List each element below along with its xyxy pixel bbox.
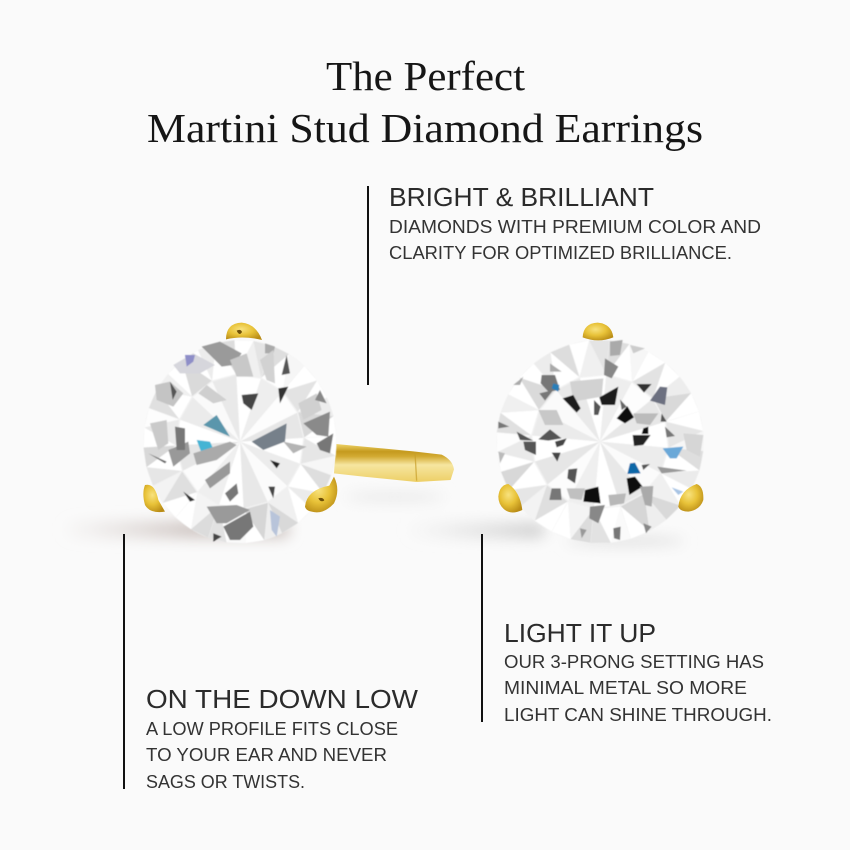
callout: bright and brilliant: DIAMONDS WITH PREMIUM COLOR AND xyxy=(389,216,761,237)
callout: on the down low: SAGS OR TWISTS. xyxy=(146,771,305,792)
title xyxy=(147,53,703,151)
prong: top xyxy=(226,323,262,340)
callout: light it up: OUR 3-PRONG SETTING HAS xyxy=(504,651,764,672)
prong: lower right xyxy=(678,484,703,512)
callout: bright and brilliant: CLARITY FOR OPTIMIZED BRILLIANCE. xyxy=(389,242,732,263)
callout: on the down low: A LOW PROFILE FITS CLOSE xyxy=(146,718,398,739)
callout: bright and brilliant xyxy=(367,182,761,385)
earring post xyxy=(334,444,454,482)
callout: light it up: LIGHT CAN SHINE THROUGH. xyxy=(504,704,772,725)
prong: lower left xyxy=(498,484,522,512)
callout: on the down low xyxy=(123,534,418,792)
shadows under earrings xyxy=(60,493,685,545)
prong: lower left xyxy=(143,485,165,512)
callout: bright and brilliant: BRIGHT & BRILLIANT xyxy=(389,182,654,212)
left diamond xyxy=(131,327,349,556)
callout: light it up: LIGHT IT UP xyxy=(504,618,656,648)
prong highlights xyxy=(237,330,324,501)
callout: on the down low: ON THE DOWN LOW xyxy=(146,684,418,714)
right diamond xyxy=(486,330,714,553)
title: The Perfect xyxy=(326,53,526,99)
callout: light it up: MINIMAL METAL SO MORE xyxy=(504,677,747,698)
callout: light it up xyxy=(481,534,772,725)
callout: on the down low: TO YOUR EAR AND NEVER xyxy=(146,744,387,765)
prong: top xyxy=(583,323,613,340)
earring: left, side view with post xyxy=(131,323,454,556)
earring: right, front view xyxy=(486,323,714,553)
title: Martini Stud Diamond Earrings xyxy=(147,105,703,151)
prong: lower right xyxy=(305,477,337,512)
